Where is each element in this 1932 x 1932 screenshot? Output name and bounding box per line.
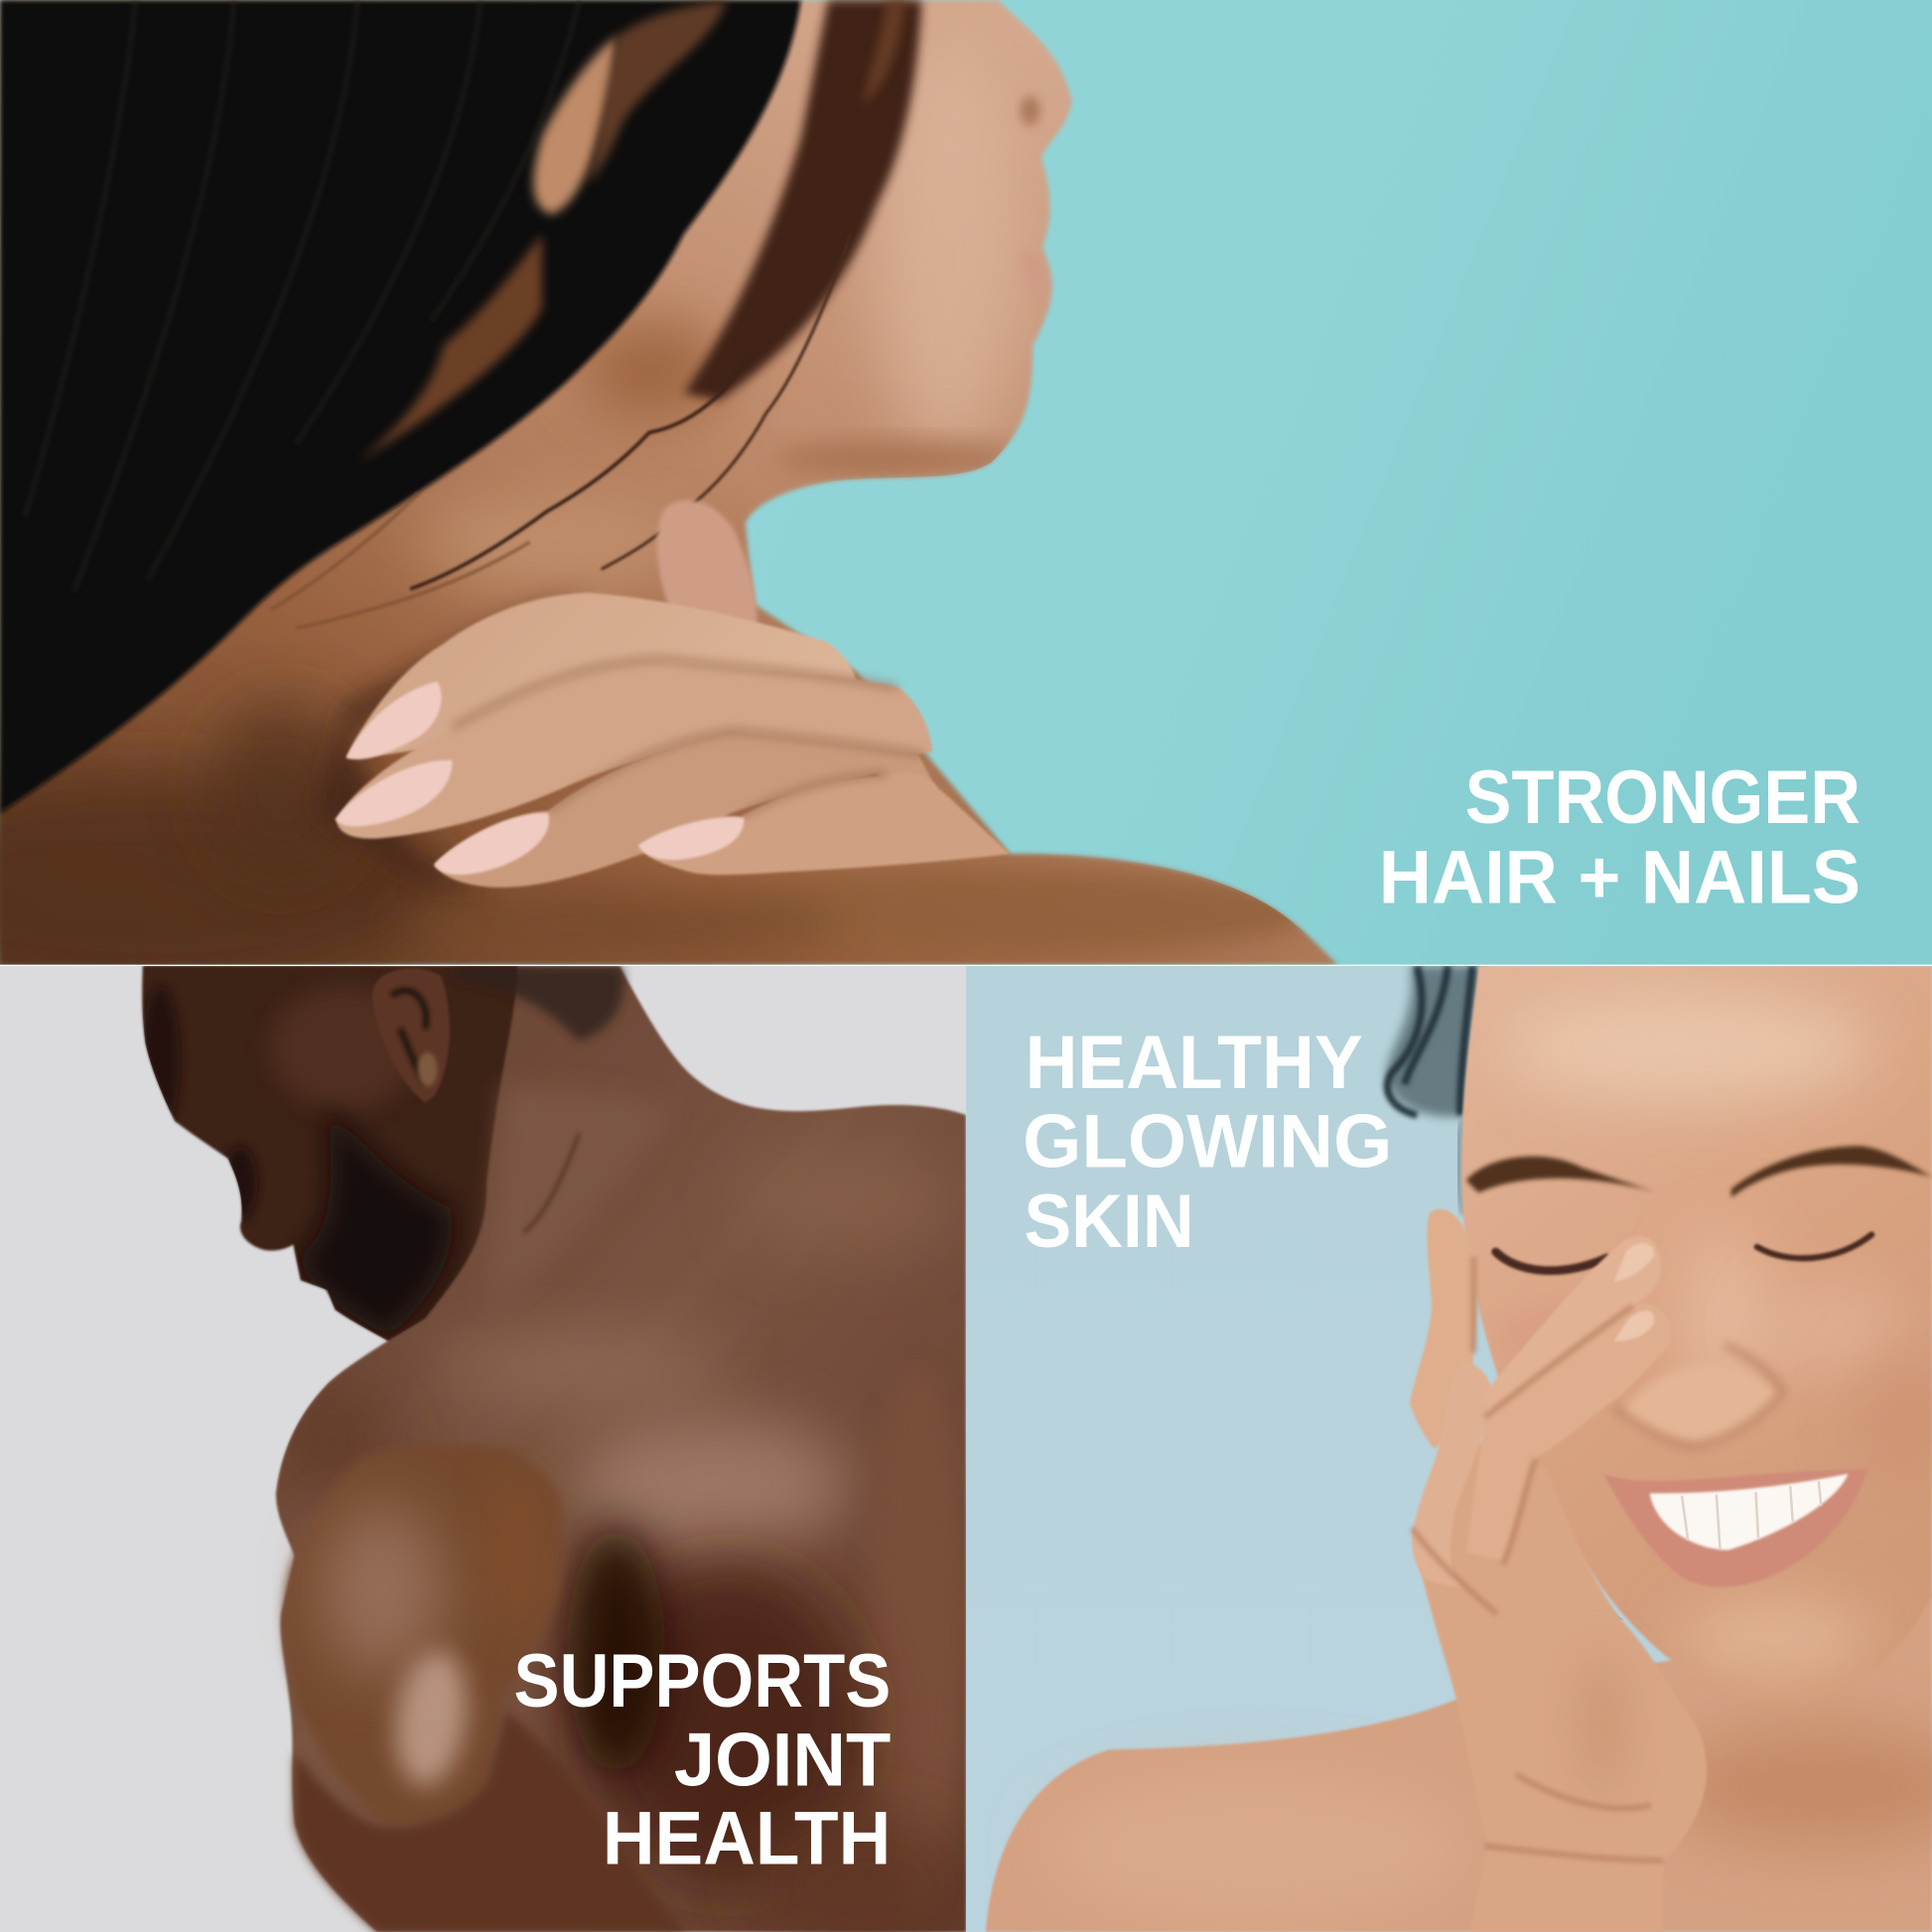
hand fold shadow bbox=[1575, 1651, 1629, 1799]
black hair mass bbox=[0, 0, 801, 813]
label: supports joint health: JOINT bbox=[674, 1718, 891, 1802]
shadow around fingers bbox=[314, 589, 586, 899]
label: healthy glowing skin bbox=[1023, 1021, 1392, 1264]
smile with teeth bbox=[1603, 1468, 1867, 1587]
label: healthy glowing skin: SKIN bbox=[1024, 1179, 1194, 1264]
lips bbox=[1048, 266, 1054, 301]
panel: supports joint health bbox=[0, 966, 973, 1932]
grey backdrop bbox=[0, 966, 966, 1932]
nose bbox=[1614, 1345, 1783, 1446]
head and face bbox=[140, 966, 517, 1340]
fore finger bbox=[1484, 1236, 1661, 1414]
brown hair strands bbox=[271, 0, 921, 628]
panel: stronger hair and nails bbox=[0, 0, 1932, 998]
finger creases bbox=[452, 659, 924, 817]
palm shading bbox=[1412, 1257, 1663, 1861]
index finger bbox=[346, 593, 857, 758]
little finger bbox=[639, 772, 1011, 875]
ring finger bbox=[1412, 1364, 1492, 1589]
label: healthy glowing skin: GLOWING bbox=[1023, 1099, 1392, 1183]
ear bbox=[372, 968, 450, 1103]
shoulder and neck bbox=[986, 1589, 1932, 1932]
wispy dark hair bbox=[1386, 966, 1484, 1213]
nostril bbox=[1021, 96, 1039, 126]
label: healthy glowing skin: HEALTHY bbox=[1026, 1021, 1363, 1105]
neck and hairline bbox=[456, 966, 671, 1307]
palm and wrist bbox=[1414, 1442, 1707, 1932]
label: supports joint health bbox=[514, 1639, 891, 1881]
woman's face bbox=[1461, 966, 1932, 1708]
gap between hand and face bbox=[1580, 1568, 1624, 1620]
label: stronger hair + nails: STRONGER bbox=[1465, 756, 1861, 840]
skin showing through the hair bbox=[533, 0, 727, 214]
raised arm bbox=[283, 1445, 686, 1932]
blue backdrop bbox=[966, 966, 1932, 1932]
hair sheen bbox=[25, 0, 579, 592]
label: stronger hair + nails: HAIR + NAILS bbox=[1379, 836, 1861, 920]
middle finger bbox=[337, 661, 932, 839]
thumb behind neck bbox=[653, 498, 759, 623]
label: supports joint health: SUPPORTS bbox=[514, 1639, 891, 1724]
teal backdrop bbox=[0, 0, 1932, 965]
little finger bbox=[1410, 1209, 1476, 1449]
eyebrows bbox=[1466, 1146, 1932, 1197]
hand covering face bbox=[1410, 1209, 1707, 1932]
woman's face, neck and shoulder bbox=[0, 0, 1338, 998]
fingertips bbox=[1614, 1243, 1654, 1341]
hand resting on shoulder bbox=[314, 500, 1011, 899]
label: stronger hair + nails bbox=[1379, 756, 1861, 920]
panel: healthy glowing skin bbox=[966, 966, 1932, 1932]
label: supports joint health: HEALTH bbox=[603, 1797, 891, 1881]
ring finger bbox=[435, 731, 936, 888]
middle finger bbox=[1466, 1304, 1672, 1560]
man's body bbox=[143, 966, 973, 1932]
closed eyes bbox=[1496, 1235, 1871, 1271]
fingernails bbox=[336, 681, 745, 875]
